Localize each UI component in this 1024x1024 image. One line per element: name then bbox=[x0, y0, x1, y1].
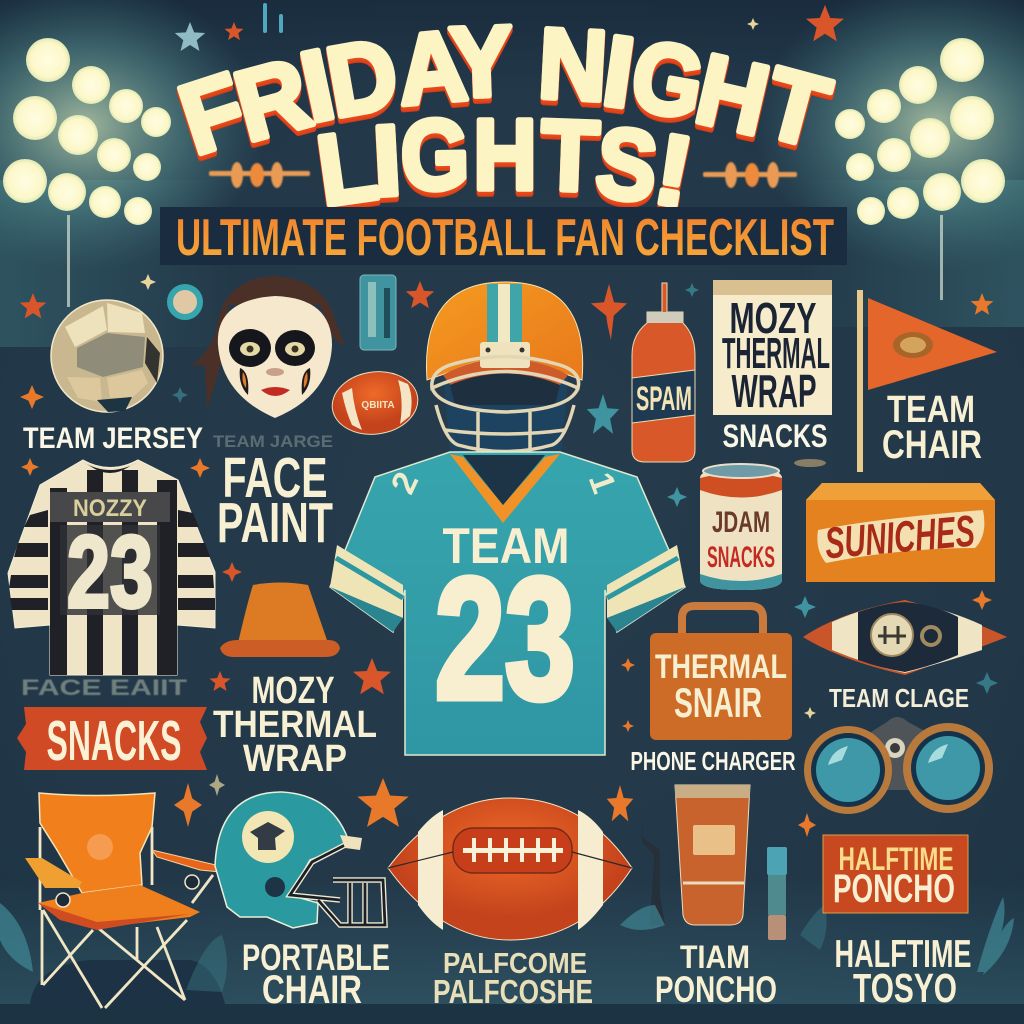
label: team chair: TEAM bbox=[887, 389, 975, 431]
title: G bbox=[623, 19, 712, 141]
striped jersey bbox=[8, 460, 215, 675]
label: tiam poncho bbox=[655, 939, 777, 1010]
stadium lights left bbox=[0, 0, 265, 307]
label: paint: PAINT bbox=[217, 491, 333, 555]
icon: snack can: JDAM bbox=[712, 506, 770, 539]
title: T bbox=[753, 45, 840, 169]
title: Y bbox=[447, 5, 515, 119]
icon: pennant flag bbox=[857, 290, 997, 472]
faded label: face paint: FACE EAIIT bbox=[21, 675, 188, 700]
icon: teal helmet bbox=[215, 792, 385, 928]
title: I bbox=[370, 104, 404, 218]
title: I bbox=[597, 14, 641, 129]
banner: snacks: SNACKS bbox=[46, 709, 182, 773]
icon: soccer ball bbox=[51, 300, 163, 412]
label: face: FACE bbox=[222, 446, 328, 510]
sign: halftime poncho: HALFTIME bbox=[838, 841, 954, 877]
title: S bbox=[591, 107, 662, 224]
title: R bbox=[224, 36, 321, 162]
label: phone charger: PHONE CHARGER bbox=[630, 746, 796, 776]
title: ! bbox=[647, 112, 701, 229]
label: portable chair: CHAIR bbox=[262, 968, 362, 1012]
title: D bbox=[319, 17, 406, 139]
icon: thermal bag: SNAIR bbox=[674, 679, 762, 726]
central helmet bbox=[426, 282, 583, 456]
foliage: bottom left and right bbox=[0, 897, 1014, 992]
title: A bbox=[393, 9, 471, 126]
label: halftime tosyo bbox=[834, 933, 972, 1011]
icon: spam bottle bbox=[632, 283, 695, 462]
title: G bbox=[400, 98, 470, 211]
label: mozy thermal wrap: MOZY bbox=[252, 670, 334, 712]
main jersey: TEAM bbox=[442, 518, 570, 574]
icon: orange camp chair bbox=[25, 793, 233, 1008]
icon: thermal bag: THERMAL bbox=[655, 648, 787, 686]
laces ornament right bbox=[703, 162, 797, 188]
icon: side object bbox=[620, 813, 665, 930]
label: mozy thermal wrap bbox=[213, 670, 377, 780]
card: mozy thermal wrap: MOZY bbox=[730, 294, 816, 343]
icon: thermal bag bbox=[650, 606, 792, 740]
label: palfcome: PALFCOSHE bbox=[433, 973, 593, 1010]
icon: large football bbox=[388, 798, 632, 940]
title: N bbox=[536, 7, 610, 122]
label: team jersey: TEAM JERSEY bbox=[23, 422, 203, 455]
main jersey: 23 bbox=[435, 543, 575, 735]
stadium lights right bbox=[755, 0, 1024, 300]
main jersey: 1 bbox=[581, 468, 623, 498]
label: tiam poncho: TIAM bbox=[680, 939, 750, 975]
main jersey bbox=[330, 452, 685, 755]
title bbox=[167, 5, 840, 229]
label: palfcome bbox=[433, 948, 593, 1010]
icon: binoculars bbox=[804, 717, 993, 814]
label: tiam poncho: PONCHO bbox=[655, 969, 777, 1010]
label: team chair bbox=[882, 389, 982, 467]
title: T bbox=[539, 99, 601, 213]
label: mozy thermal wrap: WRAP bbox=[243, 738, 347, 780]
icon: charger stick bbox=[767, 847, 787, 940]
main jersey: 2 bbox=[384, 466, 426, 500]
sign: halftime poncho: PONCHO bbox=[833, 867, 955, 911]
icon: small football bbox=[328, 366, 422, 440]
laces ornament left bbox=[209, 162, 310, 188]
title: F bbox=[167, 51, 258, 176]
icon: team badge bbox=[803, 600, 1007, 675]
card: mozy thermal wrap bbox=[713, 280, 832, 417]
icon: snack can: SNACKS bbox=[707, 541, 775, 574]
label: team clage: TEAM CLAGE bbox=[829, 683, 969, 713]
icon: orange hat bbox=[220, 582, 340, 657]
card: mozy thermal wrap: WRAP bbox=[732, 365, 816, 417]
sign: halftime poncho bbox=[823, 835, 968, 913]
icon: small football: QBIITA bbox=[361, 400, 395, 411]
title: L bbox=[311, 108, 384, 227]
label: halftime tosyo: TOSYO bbox=[853, 965, 957, 1011]
icon: small can bbox=[360, 275, 396, 350]
label: team chair: CHAIR bbox=[882, 423, 982, 467]
striped jersey: 23 bbox=[67, 515, 153, 629]
card: mozy thermal wrap: THERMAL bbox=[722, 329, 830, 378]
title: H bbox=[687, 32, 779, 157]
icon: face paint mask bbox=[192, 276, 345, 418]
title: H bbox=[473, 99, 537, 210]
title: I bbox=[291, 27, 343, 143]
icon: spam bottle: SPAM bbox=[636, 380, 692, 418]
banner: snacks bbox=[17, 707, 207, 773]
striped jersey: NOZZY bbox=[73, 495, 147, 522]
icon: tumbler bbox=[675, 785, 750, 925]
label: snacks: SNACKS bbox=[722, 418, 828, 454]
decorative stars bbox=[20, 3, 998, 837]
label: mozy thermal wrap: THERMAL bbox=[213, 704, 377, 746]
icon: sunches box bbox=[806, 483, 995, 582]
icon: snack can bbox=[700, 464, 782, 590]
label: portable chair bbox=[242, 937, 390, 1012]
label: palfcome: PALFCOME bbox=[443, 948, 587, 980]
label: portable chair: PORTABLE bbox=[242, 937, 390, 978]
faded label: team jarg: TEAM JARGE bbox=[213, 432, 333, 451]
